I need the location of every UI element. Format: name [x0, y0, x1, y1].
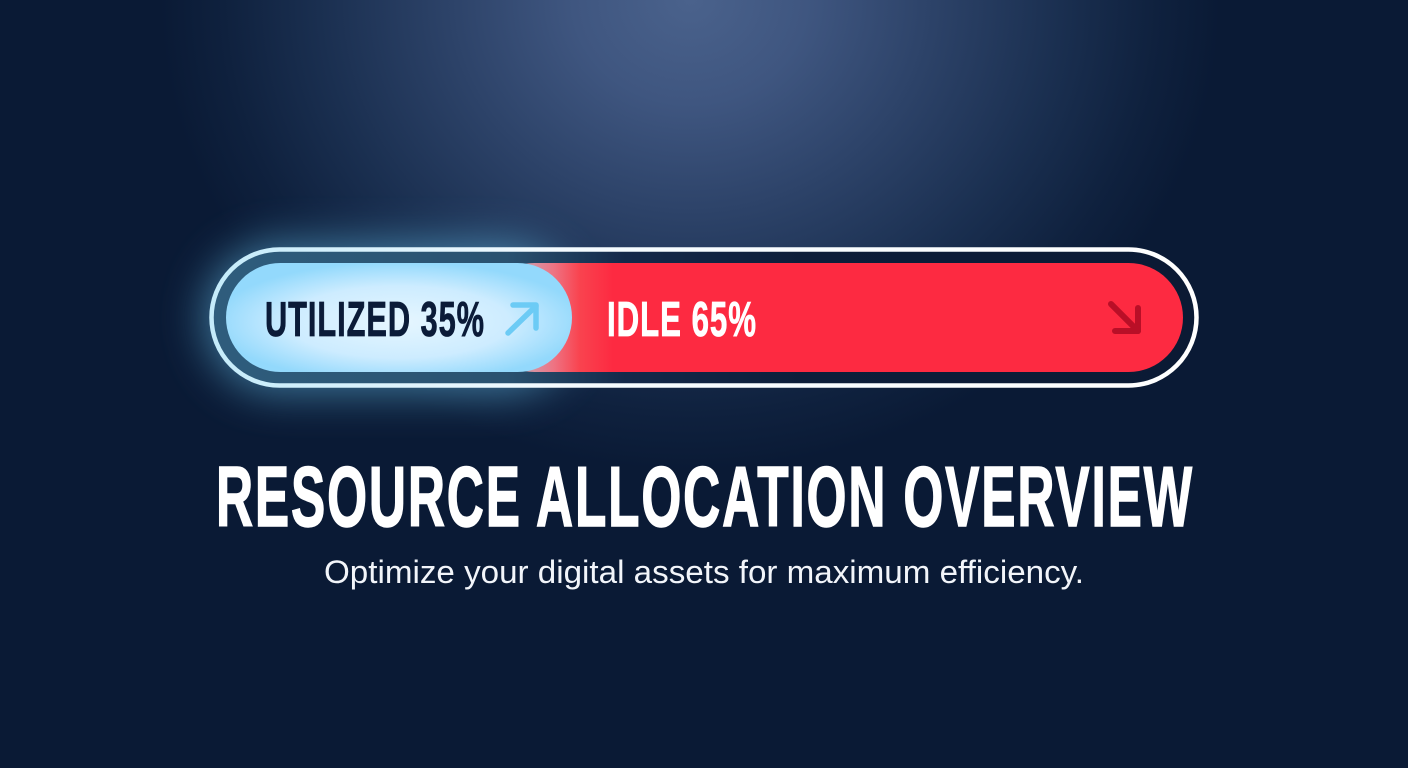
icon: up arrow: [508, 305, 536, 333]
bar outer ring: [212, 250, 1196, 386]
icon: down arrow: [1111, 304, 1138, 331]
idle label: IDLE 65%: [607, 293, 757, 347]
progress bar: [205, 244, 1196, 392]
subtitle: Optimize your digital assets for maximum efficiency.: [324, 554, 1084, 590]
bar track: [212, 250, 1196, 385]
idle segment: [480, 263, 1183, 372]
utilized segment: [226, 263, 572, 372]
utilized label: UTILIZED 35%: [265, 293, 485, 347]
glow behind utilized segment: [205, 244, 575, 392]
